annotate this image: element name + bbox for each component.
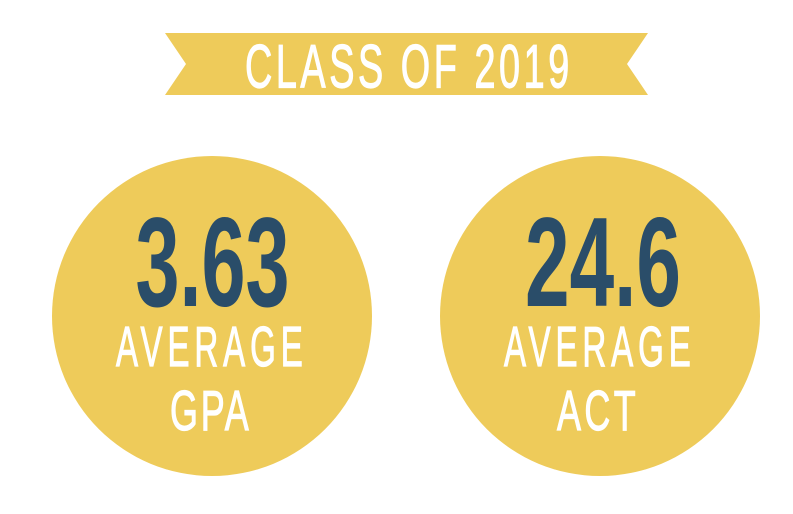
GPA value: 3.63 xyxy=(136,191,290,333)
banner xyxy=(165,32,648,101)
GPA label: AVERAGE xyxy=(116,315,303,378)
banner title: CLASS OF 2019 xyxy=(245,32,569,101)
ACT label: ACT xyxy=(557,380,636,443)
ACT label xyxy=(504,315,691,443)
ACT label: AVERAGE xyxy=(504,315,691,378)
ACT value: 24.6 xyxy=(525,191,681,333)
GPA label: GPA xyxy=(170,380,249,443)
GPA label xyxy=(116,315,303,443)
panel: average ACT xyxy=(440,156,760,476)
panel: average GPA xyxy=(52,156,372,476)
